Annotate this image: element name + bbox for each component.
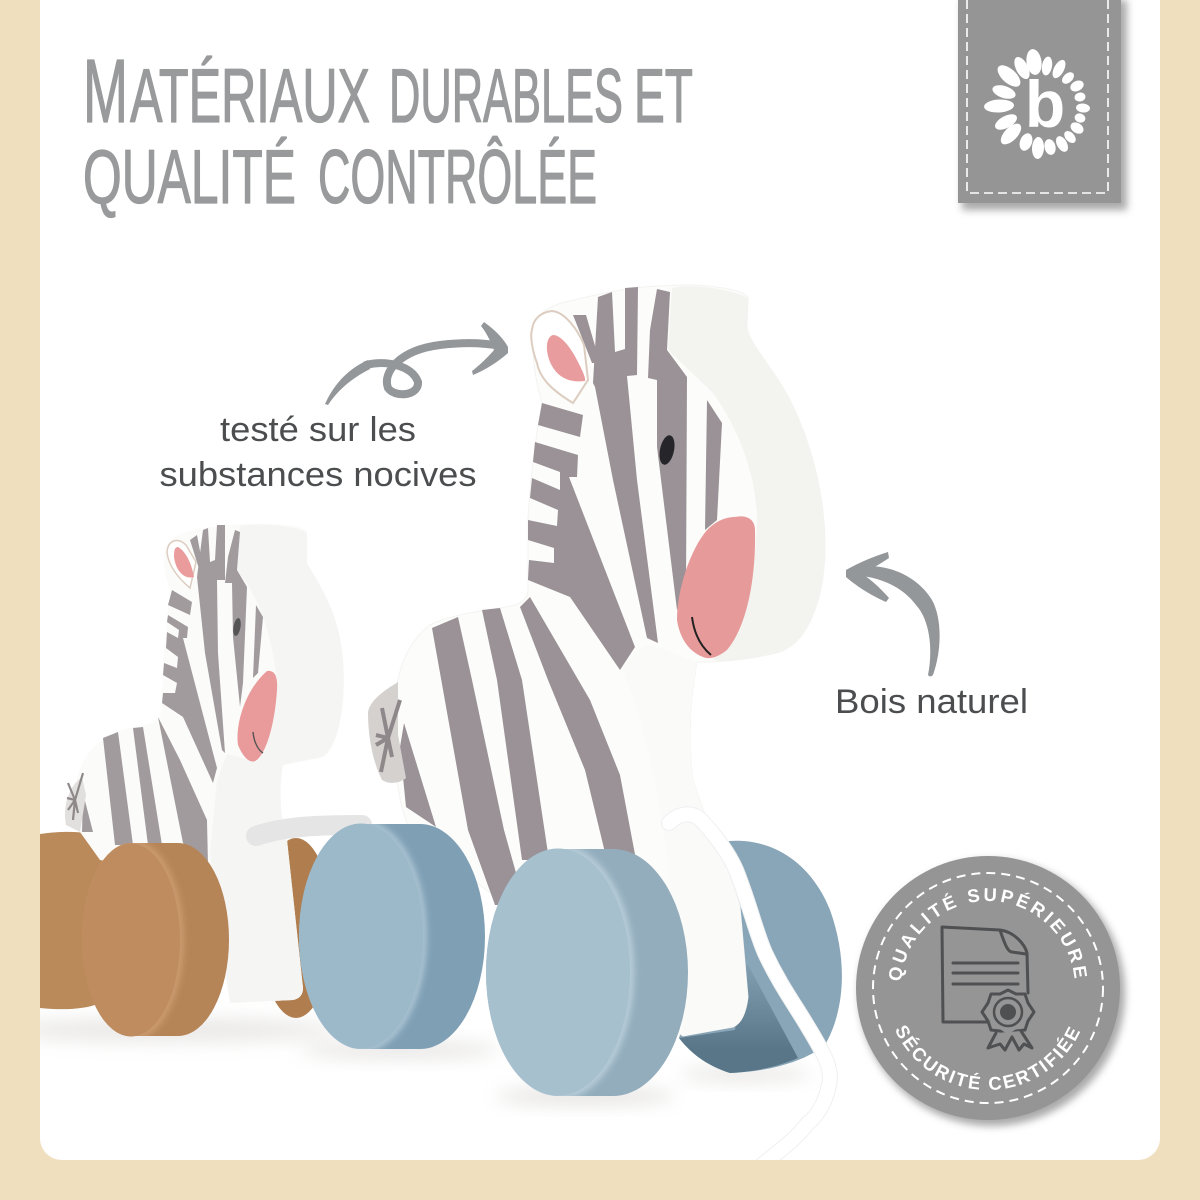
small zebra rear wheel [40, 832, 103, 1010]
large zebra nose [677, 516, 755, 658]
badge text bottom: SÉCURITÉ CERTIFIÉE [896, 1026, 1080, 1090]
badge text top: QUALITÉ SUPÉRIEURE [889, 888, 1088, 980]
quality badge [854, 855, 1130, 1131]
side thickness [668, 286, 825, 661]
side thickness [275, 841, 303, 1001]
floor shadows [0, 1018, 810, 1103]
small zebra eye [233, 618, 241, 636]
large zebra neck column [622, 645, 748, 1036]
label: Bois naturel: Bois naturel [835, 683, 1028, 721]
large zebra front wheel [486, 848, 688, 1096]
arrow: natural wood [846, 552, 940, 676]
small zebra ear [167, 541, 196, 588]
title: ET [634, 54, 693, 139]
small zebra nose [237, 671, 277, 762]
small zebra stripes [82, 525, 263, 865]
icon: flower logo petals [984, 48, 1090, 159]
label: testé sur les substances nocives: substances nocives [160, 456, 476, 494]
small zebra rope [256, 825, 362, 836]
large zebra eye [660, 435, 674, 465]
large zebra left wheel [299, 824, 485, 1049]
label: testé sur les substances nocives [160, 411, 476, 494]
label: testé sur les substances nocives: testé sur les [220, 411, 416, 449]
large zebra stripes [400, 287, 722, 905]
product photo: two zebra pull toys [0, 285, 842, 1165]
title: CONTRÔLÉE [318, 135, 597, 220]
logo letter: b [1025, 67, 1065, 141]
arrow: tested for harmful substances [325, 322, 508, 405]
brand tag with logo [958, 0, 1127, 210]
white pull rope [669, 814, 830, 1165]
small zebra far wheel [275, 838, 318, 1018]
title: M [83, 42, 128, 142]
small zebra tail [65, 777, 86, 832]
small zebra [65, 524, 344, 1003]
large zebra [368, 285, 825, 1036]
large zebra tail [368, 682, 406, 783]
icon: certificate [942, 927, 1034, 1050]
small zebra front wheel [82, 843, 229, 1036]
title [83, 42, 693, 220]
title: ATÉRIAUX [130, 54, 370, 139]
title: QUALITÉ [83, 135, 296, 220]
title: DURABLES [389, 54, 623, 139]
large zebra ear [531, 311, 588, 403]
large zebra far wheel [679, 841, 842, 1073]
